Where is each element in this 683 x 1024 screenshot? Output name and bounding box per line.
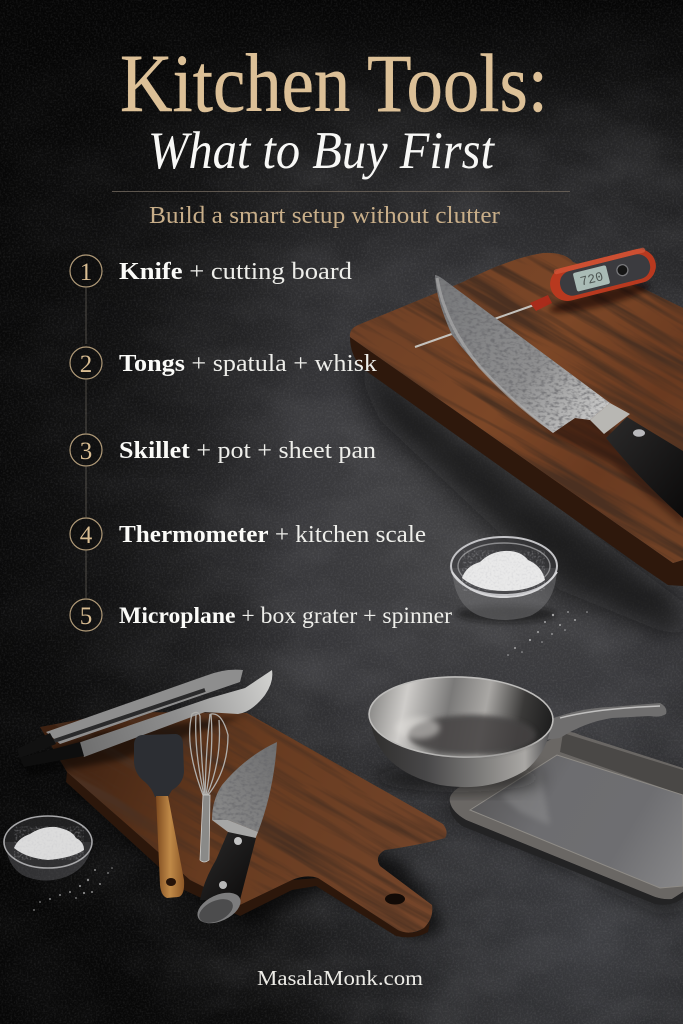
cutting board with chef knife and thermometer <box>346 248 683 645</box>
pan rim <box>450 732 683 899</box>
step 2 <box>70 347 377 379</box>
step 2: 2 <box>80 351 92 378</box>
footer brand: MasalaMonk.com <box>257 966 423 990</box>
step 3: 3 <box>80 438 92 465</box>
step 5: Microplane + box grater + spinner <box>119 603 452 628</box>
step 1 <box>70 255 352 287</box>
step 3: Skillet + pot + sheet pan <box>119 438 376 464</box>
small knife handle <box>200 832 256 900</box>
scattered salt: lower <box>33 867 113 911</box>
thermometer screen: 720 <box>579 269 605 289</box>
step 4 <box>70 518 426 550</box>
step 5: 5 <box>80 603 92 630</box>
spatula <box>134 734 184 898</box>
step 5 <box>70 599 452 631</box>
cutting board with tools <box>40 712 447 944</box>
skillet <box>368 674 666 792</box>
small knife pommel <box>193 886 245 930</box>
knife bolster <box>590 403 630 434</box>
tongs <box>17 670 272 776</box>
divider line <box>112 191 570 192</box>
skillet handle <box>534 703 666 752</box>
step 2: Tongs + spatula + whisk <box>119 351 377 377</box>
scattered salt: upper <box>507 611 588 656</box>
damascus blade <box>435 275 610 433</box>
lower board grain <box>54 713 446 932</box>
whisk <box>190 712 228 862</box>
knife handle <box>606 417 683 518</box>
step 1: 1 <box>80 259 92 286</box>
step 4: Thermometer + kitchen scale <box>119 522 426 548</box>
salt bowl: lower <box>4 816 92 881</box>
small chef knife <box>197 742 277 924</box>
salt bowl: upper <box>451 537 557 623</box>
small knife bolster <box>212 820 258 842</box>
sheet pan <box>440 732 683 915</box>
step 3 <box>70 434 376 466</box>
small knife blade <box>212 742 277 832</box>
thermometer button <box>616 263 629 277</box>
numbered list <box>70 255 452 631</box>
knife shadow <box>455 340 683 526</box>
title: Kitchen Tools: <box>120 37 548 129</box>
board top surface <box>350 253 683 563</box>
handle hole <box>385 894 405 904</box>
pan floor <box>470 755 683 888</box>
step 1: Knife + cutting board <box>119 259 352 285</box>
lower board top <box>40 712 447 933</box>
skillet base <box>408 715 536 755</box>
thermometer probe <box>415 278 652 347</box>
board wood grain <box>351 254 683 559</box>
lower board edge <box>66 772 430 937</box>
tagline: Build a smart setup without clutter <box>149 203 500 229</box>
step 4: 4 <box>80 522 93 549</box>
subtitle: What to Buy First <box>148 122 495 180</box>
thermometer body <box>546 245 660 305</box>
board front edge <box>350 337 683 586</box>
